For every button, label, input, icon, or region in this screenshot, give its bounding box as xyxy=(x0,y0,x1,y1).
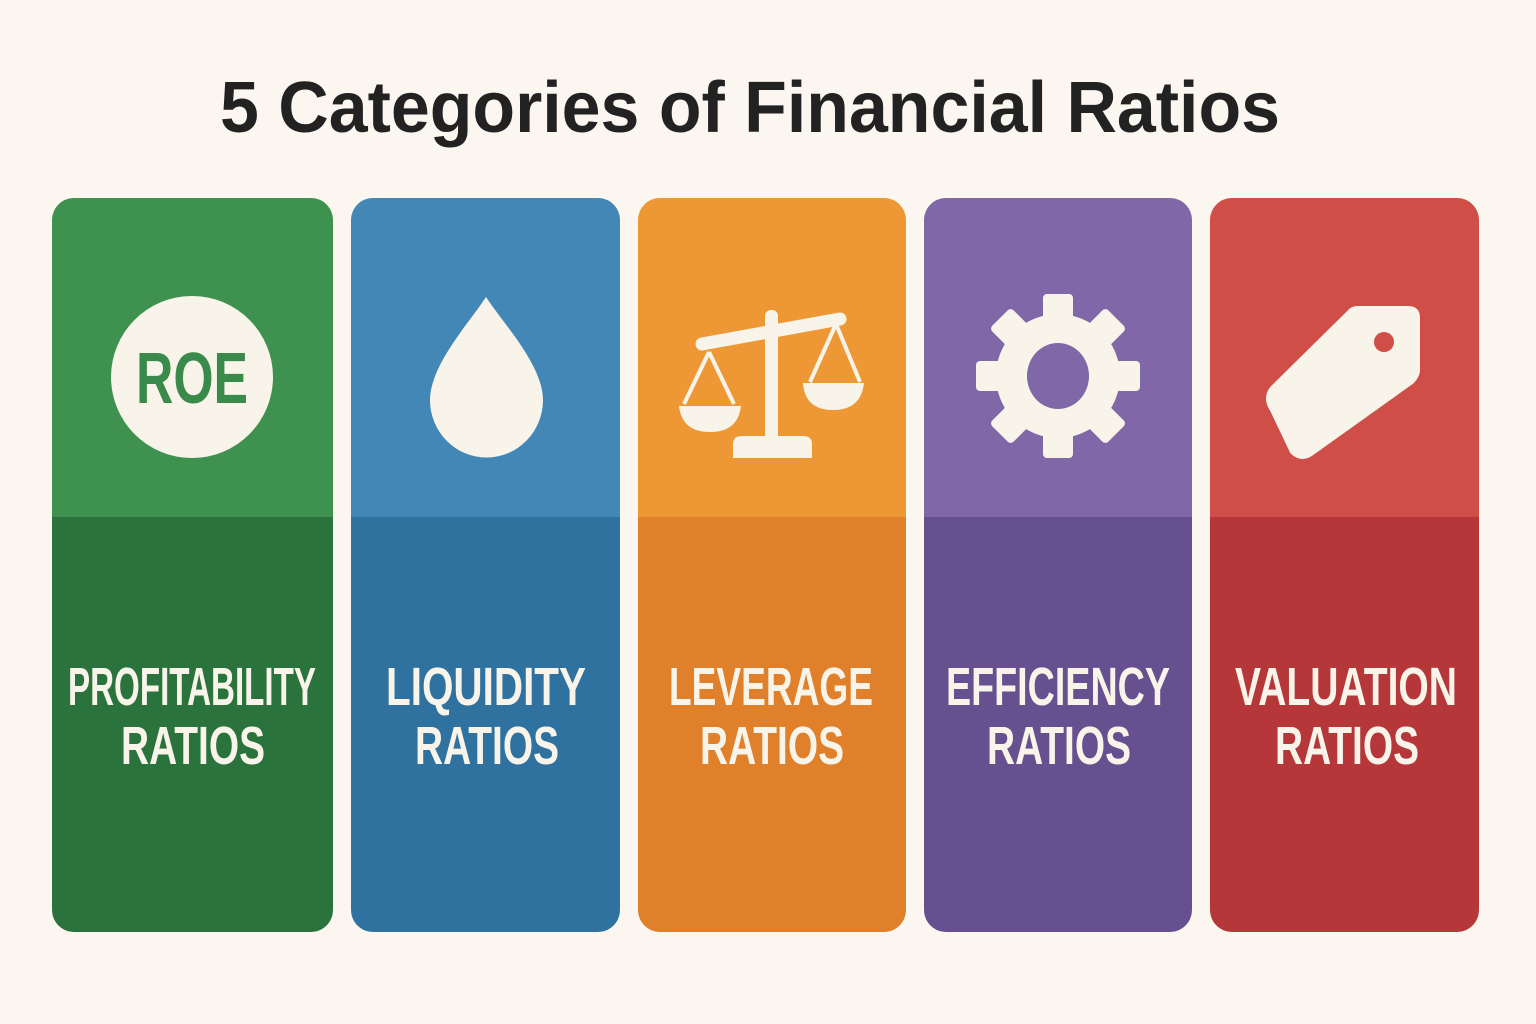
panel: efficiency xyxy=(924,198,1192,932)
label: profitability ratios: PROFITABILITY xyxy=(68,657,316,717)
label: liquidity ratios xyxy=(386,657,586,776)
label: efficiency ratios xyxy=(946,657,1170,776)
label: liquidity ratios: RATIOS xyxy=(415,716,559,776)
label: efficiency ratios: RATIOS xyxy=(987,716,1131,776)
icon: price tag xyxy=(1268,308,1418,457)
label: leverage ratios: LEVERAGE xyxy=(669,657,873,717)
panel: leverage xyxy=(638,198,906,932)
label: leverage ratios: RATIOS xyxy=(700,716,844,776)
label: valuation ratios: VALUATION xyxy=(1235,657,1457,717)
panel: profitability xyxy=(52,198,333,932)
label: liquidity ratios: LIQUIDITY xyxy=(386,657,586,717)
label: profitability ratios: RATIOS xyxy=(121,716,265,776)
icon: water drop xyxy=(430,297,543,458)
label: valuation ratios xyxy=(1235,657,1457,776)
icon: balance scale xyxy=(679,310,864,458)
panel: valuation xyxy=(1210,198,1479,932)
label: efficiency ratios: EFFICIENCY xyxy=(946,657,1170,717)
icon: ROE circle: ROE xyxy=(136,339,248,419)
icon: gear xyxy=(976,294,1140,458)
label: leverage ratios xyxy=(669,657,873,776)
panel: liquidity xyxy=(351,198,620,932)
label: valuation ratios: RATIOS xyxy=(1275,716,1419,776)
icon: ROE circle xyxy=(111,296,273,458)
title: 5 Categories of Financial Ratios xyxy=(220,68,1280,148)
label: profitability ratios xyxy=(68,657,316,776)
